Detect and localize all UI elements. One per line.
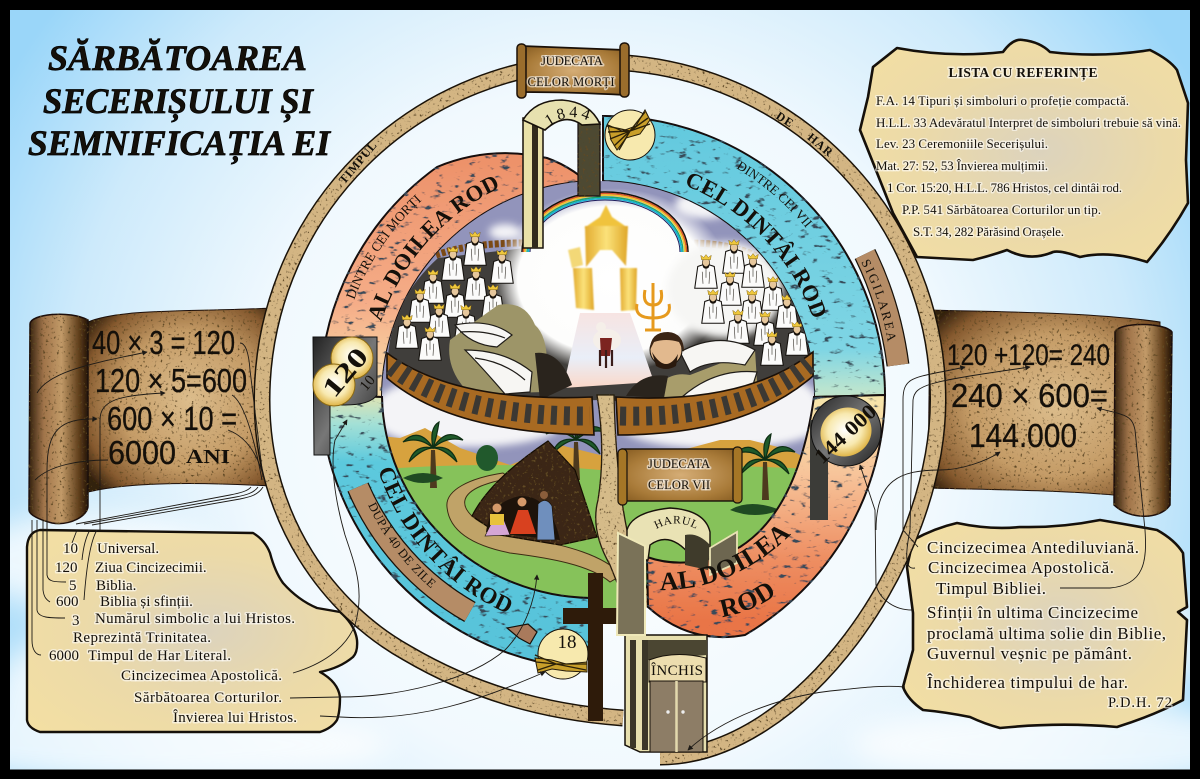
- band: al doilea rod bottom right: [647, 395, 885, 637]
- icon: sheaf 18: [535, 629, 588, 679]
- glory: [494, 188, 783, 372]
- text block: lower right notes: Închiderea timpului de har.: [927, 673, 1128, 692]
- text: band labels: [346, 160, 825, 618]
- text block: lower right notes: P.D.H. 72: [1108, 695, 1172, 711]
- badge: 120 / 10: [313, 337, 379, 455]
- title: SĂRBĂTOAREA: [48, 38, 307, 78]
- panel: reference list: [860, 40, 1188, 262]
- badge: 120 / 10: 120: [316, 342, 374, 403]
- text: band labels: AL DOILEA: [660, 526, 791, 590]
- text: band labels: CEL DINTÂI ROD: [687, 174, 825, 317]
- lamb: [594, 322, 620, 368]
- panel: left scroll with calculation: [29, 308, 272, 524]
- top scroll: judecata celor morti: CELOR MORȚI: [528, 75, 614, 89]
- clouds upper: [375, 191, 820, 449]
- back railing: [436, 243, 756, 256]
- scroll: judecata celor vii: JUDECATA: [648, 457, 710, 471]
- text block: lower left notes: Biblia.: [96, 578, 136, 594]
- ring label: de har: HAR: [805, 130, 836, 160]
- ring label: de har: DE: [774, 109, 797, 131]
- palm trees: [403, 414, 795, 515]
- door: harul gate: HARUL: [653, 516, 696, 529]
- text: band labels: CEL DINTÂI ROD: [380, 468, 512, 612]
- door: lower closed gate: ÎNCHIS: [651, 662, 703, 679]
- text block: lower right notes: Cincizecimea Apostolică.: [928, 558, 1114, 577]
- hut with family: [472, 441, 597, 545]
- calculation text left: 600 × 10 =: [107, 400, 237, 437]
- rainbow: [522, 192, 688, 252]
- angel left: [449, 304, 572, 400]
- text block: lower left notes: Numărul simbolic a lui Hristos.: [95, 611, 295, 627]
- title: SECERIȘULUI ȘI: [43, 81, 315, 122]
- calculation text right: 240 × 600=: [951, 377, 1108, 414]
- throne: [568, 205, 637, 311]
- calculation text right: 144.000: [969, 417, 1077, 454]
- lamb pedestal: [563, 313, 654, 388]
- ribbon: sigilarea: [854, 249, 910, 366]
- text block: lower right notes: [927, 538, 1172, 711]
- text: band labels: DINTRE CEI MORȚI: [346, 194, 422, 300]
- arch: 1844 pillar: [522, 99, 602, 249]
- text block: reference lines: 1 Cor. 15:20, H.L.L. 786 Hristos, cel dintâi rod.: [887, 180, 1122, 195]
- ring label: de har: [774, 109, 836, 160]
- text block: lower right notes: proclamă ultima solie din Biblie,: [927, 624, 1166, 643]
- scroll roller left: [29, 314, 88, 524]
- badge: 144 000: [809, 396, 881, 520]
- angel right with man: [626, 332, 758, 398]
- text block: lower left notes: Ziua Cincizecimii.: [95, 560, 207, 576]
- text block: lower left notes: Reprezintă Trinitatea.: [73, 630, 211, 646]
- text: band labels: DINTRE CEI VII: [736, 160, 812, 228]
- text block: reference lines: F.A. 14 Tipuri și simboluri o profeție compactă.: [876, 93, 1129, 108]
- cross: [563, 573, 617, 721]
- text block: lower left notes: 6000: [49, 648, 79, 664]
- title: [28, 38, 332, 165]
- icon: sheaf 18: 18: [558, 632, 576, 653]
- elders left: [396, 232, 513, 360]
- text block: reference lines: Mat. 27: 52, 53 Învierea mulțimii.: [876, 158, 1048, 173]
- ribbon: sigilarea: SIGILAREA: [862, 260, 896, 342]
- text block: lower right notes: Cincizecimea Antediluviană.: [927, 538, 1139, 557]
- text block: reference lines: Lev. 23 Ceremoniile Secerișului.: [876, 136, 1048, 151]
- panel: lower left notes: [27, 530, 357, 732]
- text block: lower left notes: 5: [69, 578, 76, 594]
- heading: reference list: LISTA CU REFERINȚE: [948, 65, 1098, 81]
- text block: lower left notes: Cincizecimea Apostolică.: [121, 668, 282, 684]
- elders right: [695, 240, 808, 365]
- door: harul gate: [626, 507, 738, 576]
- title: SEMNIFICAȚIA EI: [28, 123, 332, 165]
- door: left open leaf: [617, 533, 645, 635]
- text block: lower left notes: Biblia și sfinții.: [100, 594, 193, 610]
- railing: right: [616, 352, 813, 435]
- top scroll: judecata celor morti: JUDECATA: [541, 53, 604, 68]
- scroll: judecata celor vii: [618, 447, 742, 505]
- text block: reference lines: H.L.L. 33 Adevăratul Interpret de simboluri trebuie să vină.: [876, 115, 1181, 130]
- menorah: [637, 283, 669, 330]
- calculation text left: [92, 324, 247, 471]
- arch: 1844 pillar: 1844: [545, 106, 590, 126]
- text block: lower left notes: [49, 541, 297, 726]
- ring label: timpul: TIMPUL: [336, 138, 380, 187]
- leader lines: [32, 343, 1146, 750]
- text block: lower left notes: Sărbătoarea Corturilor.: [134, 690, 282, 706]
- text block: lower left notes: 10: [63, 541, 78, 557]
- text block: lower right notes: Sfinții în ultima Cincizecime: [927, 603, 1138, 622]
- band: al doilea rod top left: [320, 153, 598, 397]
- band: cel dintai rod bottom left: [320, 395, 590, 663]
- calculation text left: ANI: [186, 446, 230, 468]
- text block: lower left notes: Învierea lui Hristos.: [173, 709, 297, 726]
- central tree trunk: [595, 394, 647, 608]
- text block: reference lines: P.P. 541 Sărbătoarea Corturilor un tip.: [902, 202, 1101, 217]
- text block: lower right notes: Timpul Bibliei.: [936, 579, 1046, 598]
- text: band labels: ROD: [718, 584, 774, 618]
- text: band labels: AL DOILEA ROD: [369, 177, 498, 322]
- ribbon tail: [507, 624, 537, 644]
- railing: left: [387, 353, 594, 435]
- calculation text right: [947, 339, 1110, 454]
- calculation text right: 120 +120= 240: [947, 339, 1110, 372]
- band: cel dintai rod top right: [603, 116, 885, 397]
- door: lower closed gate: [625, 635, 707, 752]
- ribbon: dupa 40 de zile: DUPĂ 40 DE ZILE: [368, 502, 436, 588]
- panel: right scroll with calculation: [928, 310, 1172, 516]
- calculation text left: 40 × 3 = 120: [92, 324, 235, 361]
- text block: lower left notes: 3: [72, 613, 80, 629]
- calculation text left: 120 × 5=600: [95, 362, 247, 399]
- badge: 120 / 10: 10: [357, 373, 379, 394]
- elders backdrop: [388, 248, 813, 402]
- text block: lower left notes: 600: [56, 594, 78, 610]
- badge: 144 000: 144 000: [809, 399, 881, 469]
- icon: sheaf top: [605, 110, 655, 160]
- lower land: [388, 428, 800, 608]
- text block: lower left notes: Timpul de Har Literal.: [88, 648, 231, 664]
- text block: lower left notes: 120: [55, 560, 78, 576]
- panel: lower right notes: [903, 520, 1187, 728]
- text block: lower left notes: Universal.: [97, 541, 159, 557]
- scroll roller right: [1114, 324, 1172, 516]
- scene: inner circle: [382, 181, 814, 608]
- calculation text left: 6000: [108, 434, 176, 471]
- top scroll: judecata celor morti: [517, 43, 629, 98]
- text block: reference lines: [876, 93, 1181, 239]
- text block: reference lines: S.T. 34, 282 Părăsind Orașele.: [913, 224, 1064, 239]
- text block: lower right notes: Guvernul veșnic pe pământ.: [927, 644, 1132, 663]
- outer ring: timpul de har: [262, 62, 938, 757]
- scroll: judecata celor vii: CELOR VII: [648, 478, 710, 492]
- ribbon: dupa 40 de zile: [348, 482, 476, 622]
